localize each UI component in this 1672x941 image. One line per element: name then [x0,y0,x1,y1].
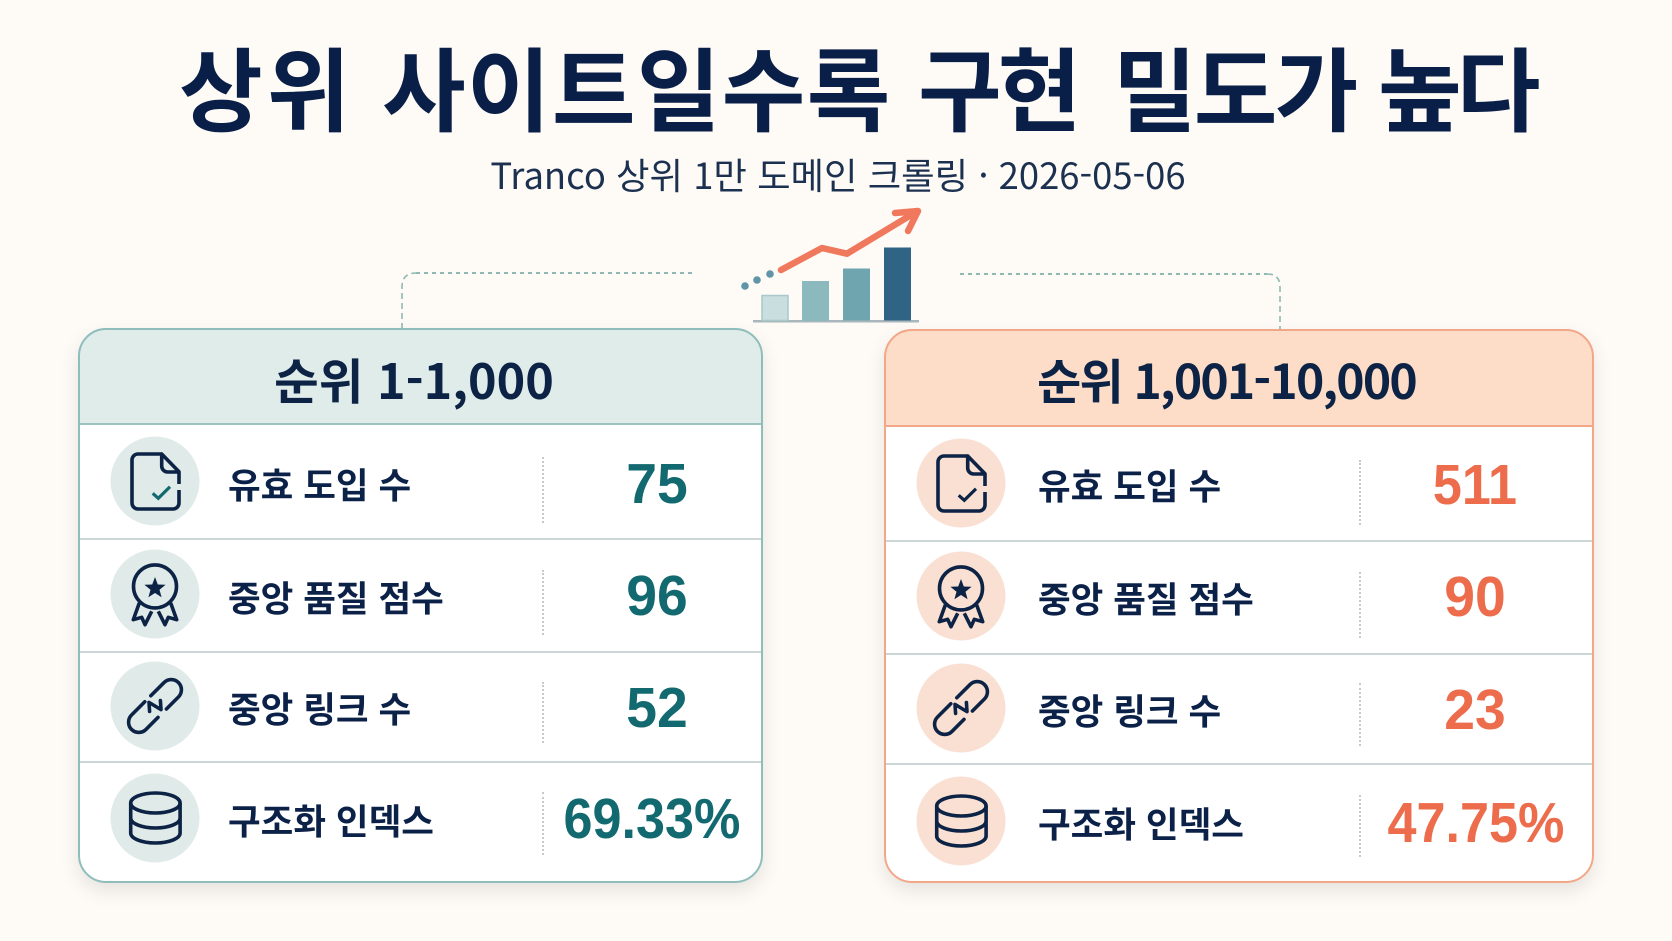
value: 47.75% [1388,791,1564,855]
value: 511 [1433,453,1517,517]
row: structured index [916,776,1564,866]
value: 23 [1444,678,1506,742]
icon: award ribbon [110,550,200,638]
row: median quality score [78,540,763,653]
icon: chain link [916,664,1006,752]
label: 중앙 링크 수 [228,682,411,733]
title: 사이트일수록 [382,19,892,151]
icon: database [916,776,1006,866]
value: 96 [626,564,688,628]
icon: rising bar chart with arrow [741,208,922,322]
value: 90 [1444,565,1506,629]
row: median link count [884,655,1594,765]
value: 52 [626,676,688,740]
icon: award ribbon [916,552,1006,640]
label: 유효 도입 수 [228,458,411,509]
icon: document check [110,436,200,526]
row: structured index [110,774,740,862]
title: 상위 [179,19,354,151]
title: 구현 [918,19,1077,151]
row: median link count [78,653,763,763]
connector: left card to chart [401,272,692,328]
label: 중앙 품질 점수 [228,570,444,622]
icon: document check [916,438,1006,528]
panel header: rank 1,001-10,000: 순위 1,001-10,000 [1037,343,1416,413]
title [179,19,1539,151]
label: 중앙 링크 수 [1038,684,1221,734]
row: valid adoptions [884,427,1594,542]
label: 중앙 품질 점수 [1038,572,1254,623]
subtitle: Tranco 상위 1만 도메인 크롤링 · 2026-05-06 [490,148,1186,200]
label: 구조화 인덱스 [1038,797,1244,848]
value: 75 [626,452,688,516]
panel header: rank 1-1,000 [78,328,763,425]
title: 밀도가 [1113,19,1355,151]
icon: database [110,774,200,862]
icon: chain link [110,662,200,750]
row: median quality score [884,542,1594,655]
panel header: rank 1-1,000: 순위 1-1,000 [274,343,554,413]
label: 유효 도입 수 [1038,459,1221,510]
panel: rank 1,001-10,000 [884,329,1594,883]
label: 구조화 인덱스 [228,794,434,845]
connector: right card to chart [960,273,1281,329]
panel: rank 1-1,000 [78,328,763,883]
row: valid adoptions [78,425,763,540]
panel header: rank 1,001-10,000 [884,329,1594,427]
value: 69.33% [564,787,740,851]
title: 높다 [1378,19,1535,151]
